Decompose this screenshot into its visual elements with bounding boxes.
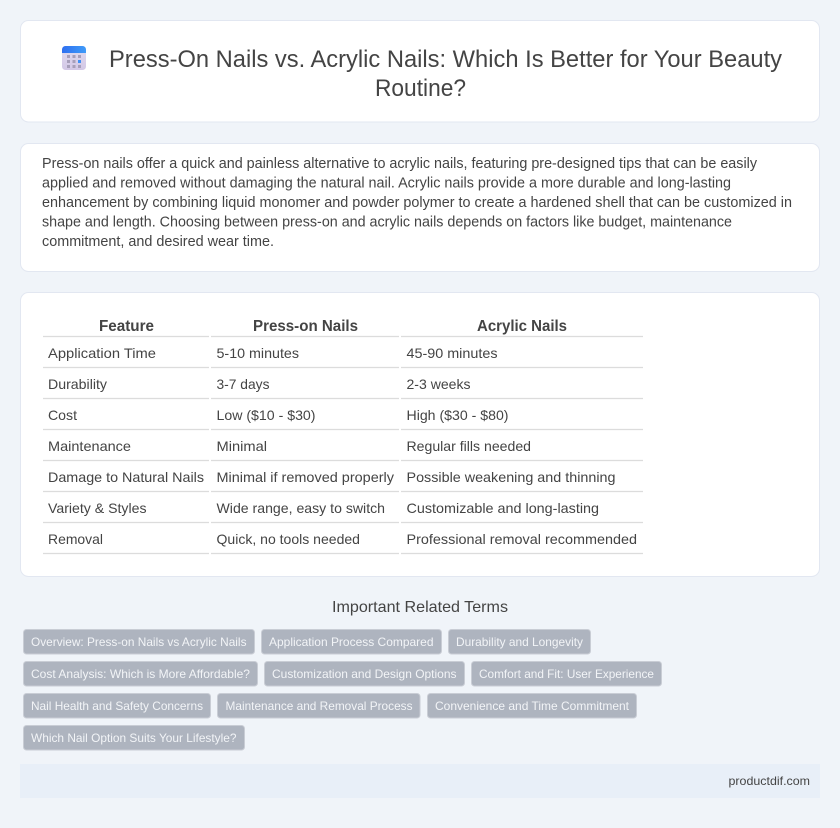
table row: variety and styles [48,500,599,516]
tag: application process: Application Process Compared [269,635,434,649]
table row: cost: High ($30 - $80) [406,407,508,423]
tag: convenience: Convenience and Time Commitment [435,699,630,713]
table header row: Feature [99,318,154,335]
table row: durability: 3-7 days [216,376,270,392]
tag: application process [262,630,442,654]
heading: page title: Press-On Nails vs. Acrylic Nails: Which Is Better for Your Beauty [109,46,783,73]
panel: summary paragraph [20,144,820,272]
tag: maintenance and removal [218,694,420,718]
table row: maintenance: Minimal [216,438,267,454]
panel: comparison table [20,292,820,576]
tag: lifestyle [24,726,244,750]
table row: variety and styles: Variety & Styles [48,500,146,516]
tag: comfort and fit [472,662,662,686]
table row: cost [48,407,508,423]
table row: maintenance: Maintenance [48,438,131,454]
heading: related terms: Important Related Terms [332,599,508,616]
table row: variety and styles: Wide range, easy to switch [216,500,385,516]
tag: nail health: Nail Health and Safety Concerns [31,699,203,713]
tag: durability [448,630,590,654]
table row: application time: Application Time [48,345,156,361]
heading: page title [109,46,783,102]
table row: damage to natural nails: Possible weakening and thinning [406,469,616,485]
text block: summary: enhancement by combining liquid monomer and powder polymer to create a hardened shell that can be customized in [42,195,792,211]
tag: comfort and fit: Comfort and Fit: User Experience [479,667,654,681]
icon: calendar [62,46,86,70]
table row: removal: Quick, no tools needed [216,531,360,547]
table row: damage to natural nails: Minimal if removed properly [216,469,394,485]
table row: cost: Cost [48,407,77,423]
table row: damage to natural nails: Damage to Natural Nails [48,469,204,485]
tag: lifestyle: Which Nail Option Suits Your Lifestyle? [31,731,237,745]
table header row: Press-on Nails [253,318,358,335]
table row: variety and styles: Customizable and long-lasting [406,500,599,516]
tag: nail health [24,694,210,718]
table header row: Acrylic Nails [477,318,567,335]
table row: maintenance [48,438,531,454]
text block: summary [42,156,792,250]
table row: durability: Durability [48,376,107,392]
footer text: source: productdif.com [728,774,810,788]
tag: convenience [428,694,636,718]
table row: damage to natural nails [48,469,616,485]
tag: durability: Durability and Longevity [456,635,583,649]
table row: durability: 2-3 weeks [406,376,470,392]
footer bar [20,764,820,798]
heading: page title: Routine? [375,75,466,102]
table row: removal [48,531,637,547]
text block: summary: commitment, and desired wear time. [42,234,274,250]
table header row [99,318,567,335]
panel: title header [20,20,820,122]
tag: overview: Overview: Press-on Nails vs Acrylic Nails [31,635,246,649]
table row: durability [48,376,470,392]
tag: cost analysis [24,662,258,686]
tag: maintenance and removal: Maintenance and Removal Process [226,699,412,713]
text block: summary: shape and length. Choosing between press-on and acrylic nails depends on factors like budget, maintenance [42,214,732,230]
table row: application time: 45-90 minutes [406,345,498,361]
text block: summary: applied and removed without damaging the natural nail. Acrylic nails provide a more durable and long-lasting [42,176,731,192]
table row: cost: Low ($10 - $30) [216,407,316,423]
table row: removal: Professional removal recommended [406,531,637,547]
table row: maintenance: Regular fills needed [406,438,531,454]
tag: cost analysis: Cost Analysis: Which is More Affordable? [31,667,250,681]
tag: overview [24,630,254,654]
table row: application time: 5-10 minutes [216,345,299,361]
table row: removal: Removal [48,531,103,547]
table row: application time [48,345,498,361]
section: important related terms [24,599,662,750]
tag: customization [264,662,464,686]
tag: customization: Customization and Design Options [272,667,456,681]
text block: summary: Press-on nails offer a quick and painless alternative to acrylic nails, featuring pre-designed tips that can be easily [42,156,758,172]
